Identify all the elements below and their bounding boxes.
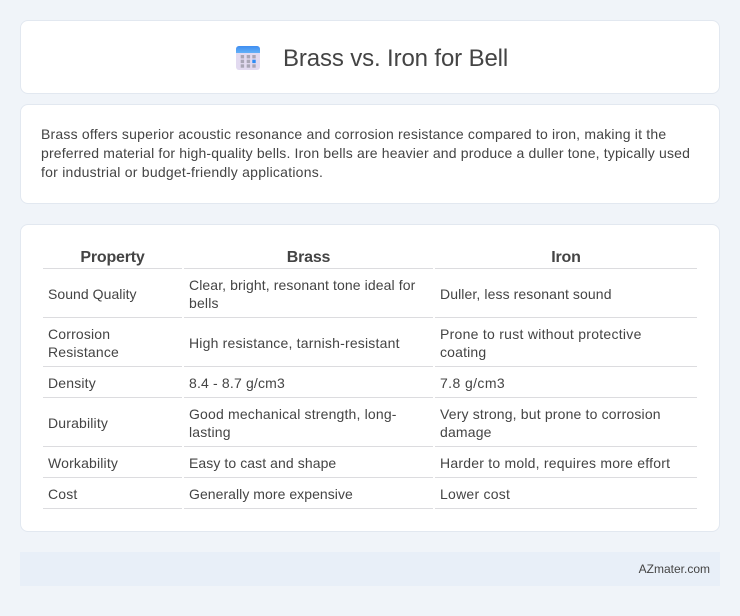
row: cost: Lower cost (440, 486, 510, 502)
row: corrosion resistance: Corrosion (48, 326, 110, 342)
summary text (41, 126, 690, 180)
row: cost (48, 486, 510, 502)
row: sound quality: bells (189, 295, 219, 311)
panel: summary (20, 104, 720, 204)
summary text: Brass offers superior acoustic resonance and corrosion resistance compared to iron, making it the (41, 126, 666, 142)
summary text: for industrial or budget-friendly applications. (41, 164, 323, 180)
row: sound quality (48, 277, 612, 311)
row: durability: damage (440, 424, 492, 440)
header row (80, 249, 581, 266)
header row: Brass (287, 249, 330, 266)
row: corrosion resistance: coating (440, 344, 486, 360)
row: sound quality: Sound Quality (48, 286, 137, 302)
row: cost: Generally more expensive (189, 486, 353, 502)
row: density: Density (48, 375, 96, 391)
header row: Property (80, 249, 145, 266)
row: cost: Cost (48, 486, 77, 502)
row: sound quality: Duller, less resonant sound (440, 286, 612, 302)
row: workability: Workability (48, 455, 118, 471)
panel: comparison table (20, 224, 720, 532)
row: workability: Easy to cast and shape (189, 455, 336, 471)
row: density: 8.4 - 8.7 g/cm3 (189, 375, 285, 391)
row: density (48, 375, 505, 391)
row: durability: Very strong, but prone to corrosion (440, 406, 661, 422)
row: corrosion resistance (48, 326, 642, 360)
row: workability: Harder to mold, requires more effort (440, 455, 670, 471)
row: corrosion resistance: Prone to rust without protective (440, 326, 642, 342)
row: corrosion resistance: High resistance, tarnish-resistant (189, 335, 400, 351)
row: density: 7.8 g/cm3 (440, 375, 505, 391)
row: durability: lasting (189, 424, 231, 440)
row: durability: Durability (48, 415, 108, 431)
footer (20, 552, 720, 586)
panel: title (20, 20, 720, 94)
row: workability (48, 455, 670, 471)
summary text: preferred material for high-quality bells. Iron bells are heavier and produce a duller tone, typically used (41, 145, 690, 161)
row: durability: Good mechanical strength, long- (189, 406, 397, 422)
footer credit: AZmater.com (639, 562, 710, 576)
header row: Iron (551, 249, 581, 266)
row: durability (48, 406, 661, 440)
row: sound quality: Clear, bright, resonant tone ideal for (189, 277, 415, 293)
title text: Brass vs. Iron for Bell (283, 45, 508, 72)
row: corrosion resistance: Resistance (48, 344, 119, 360)
icon: calendar (236, 46, 260, 70)
